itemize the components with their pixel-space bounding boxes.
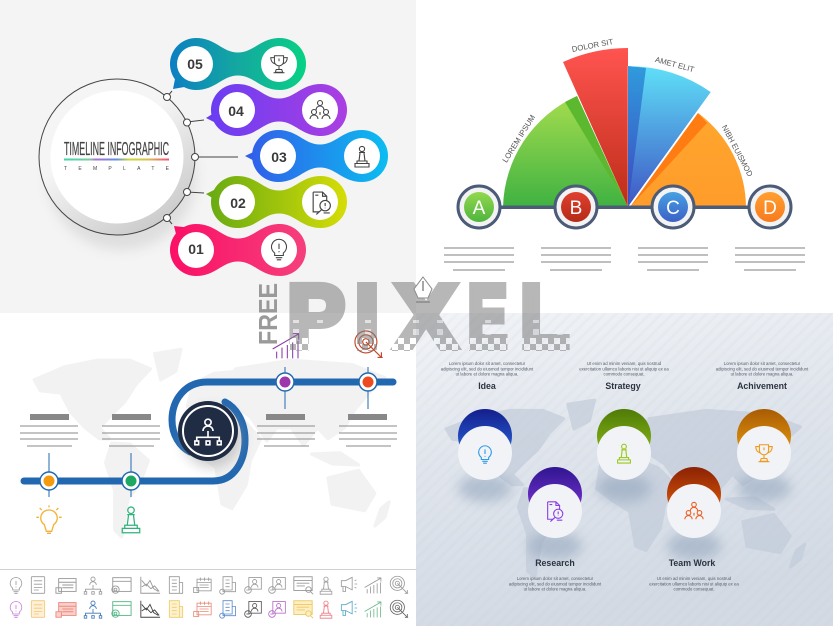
card: research [528,467,582,560]
divider [0,569,416,570]
icon row: grey [10,576,408,594]
sector labels: DOLOR SIT [571,37,614,54]
card descriptions: commodo consequat. [673,586,715,592]
watermark word: PIXEL [289,282,570,351]
card: team work [667,467,721,560]
panel: semicircle sectors [444,37,805,270]
icon: target [355,331,383,357]
central disc [39,79,196,250]
panel: world timeline [0,331,416,618]
pill 02 [206,176,347,228]
card headings: Achivement [737,381,787,391]
green sector [503,96,628,207]
placeholder text lines [444,248,805,270]
sector labels: LOREM IPSUM [501,113,537,164]
card descriptions: Ut enim ad minim veniam, quis nostrud [657,576,732,581]
pill 02: 02 [230,195,246,211]
pill 01: 01 [188,241,204,257]
card descriptions: ut labore et dolore magna aliqua. [524,586,586,592]
pill 05: 05 [187,56,203,72]
panel: pill timeline: TIMELINE INFOGRAPHIC [64,139,169,159]
card descriptions [441,361,809,592]
pill 04 [206,84,347,136]
pill 03 [245,130,388,182]
red sector [563,48,628,207]
node green [122,472,140,490]
watermark word: PIXEL: I [354,268,380,368]
card descriptions: Ut enim ad minim veniam, quis nostrud [587,361,662,366]
badge B: B [570,198,582,219]
card headings: Strategy [605,381,641,391]
pill 05 [170,38,306,90]
card descriptions: ut labore et dolore magna aliqua. [731,372,793,376]
panel: circles on map [416,313,833,626]
title underline [64,158,169,160]
card descriptions: adipiscing elit, sed do eiusmod tempor incididunt [716,366,809,372]
world map [34,349,389,537]
card descriptions: exercitation ullamco laboris nisi ut aliquip ex ea [579,366,669,372]
node orange [40,472,58,490]
watermark word: PIXEL: P [287,268,345,368]
subtitle: TEMPLATE [64,166,170,172]
pill 03: 03 [271,149,287,165]
card headings: Idea [478,381,496,391]
card: strategy [597,409,651,502]
watermark word: PIXEL: E [468,268,508,368]
card descriptions: Lorem ipsum dolor sit amet, consectetur [724,361,801,366]
sector labels: AMET ELIT [654,55,695,74]
world map [446,400,805,577]
badge A: A [473,198,486,219]
card: achievement [737,409,791,502]
badge A [458,186,500,228]
card descriptions: ut labore et dolore magna aliqua. [456,372,518,376]
connectors [164,91,238,224]
icon: bulb [36,505,62,533]
card headings: Research [535,558,575,568]
sector labels [501,37,755,179]
card descriptions: exercitation ullamco laboris nisi ut aliquip ex ea [649,582,739,586]
watermark word: PIXEL: L [520,268,569,368]
watermark word: PIXEL: X [395,268,457,368]
pill 01 [170,224,306,276]
card headings [478,381,787,568]
card descriptions: adipiscing elit, sed do eiusmod tempor incididunt [509,582,602,586]
watermark [259,276,570,351]
badge C [652,186,694,228]
icon: pawn [122,507,140,533]
stems [49,367,368,497]
central badge [178,401,242,468]
text placeholders [20,414,397,446]
badge D: D [763,198,777,219]
badge C: C [666,198,680,219]
watermark word: FREE: FREE [253,283,283,345]
card: idea [458,409,512,502]
card descriptions: commodo consequat. [603,372,645,376]
badge B [555,186,597,228]
icon row: coloured [10,600,408,618]
timeline track [24,382,393,481]
watermark pen nib [414,277,432,302]
orange sector [630,113,746,207]
pill 04: 04 [228,103,244,119]
sector labels: NIBH EUISMOD [720,123,755,179]
panel: pill timeline [0,0,416,313]
icon: growth [273,334,299,358]
baseline [495,206,755,209]
card descriptions: Lorem ipsum dolor sit amet, consectetur [517,576,594,581]
blue sector [628,66,711,207]
node purple [276,373,294,391]
node red [359,373,377,391]
card descriptions: adipiscing elit, sed do eiusmod tempor incididunt [441,366,534,372]
badge D [749,186,791,228]
card headings: Team Work [669,558,715,568]
card descriptions: Lorem ipsum dolor sit amet, consectetur [449,361,526,366]
